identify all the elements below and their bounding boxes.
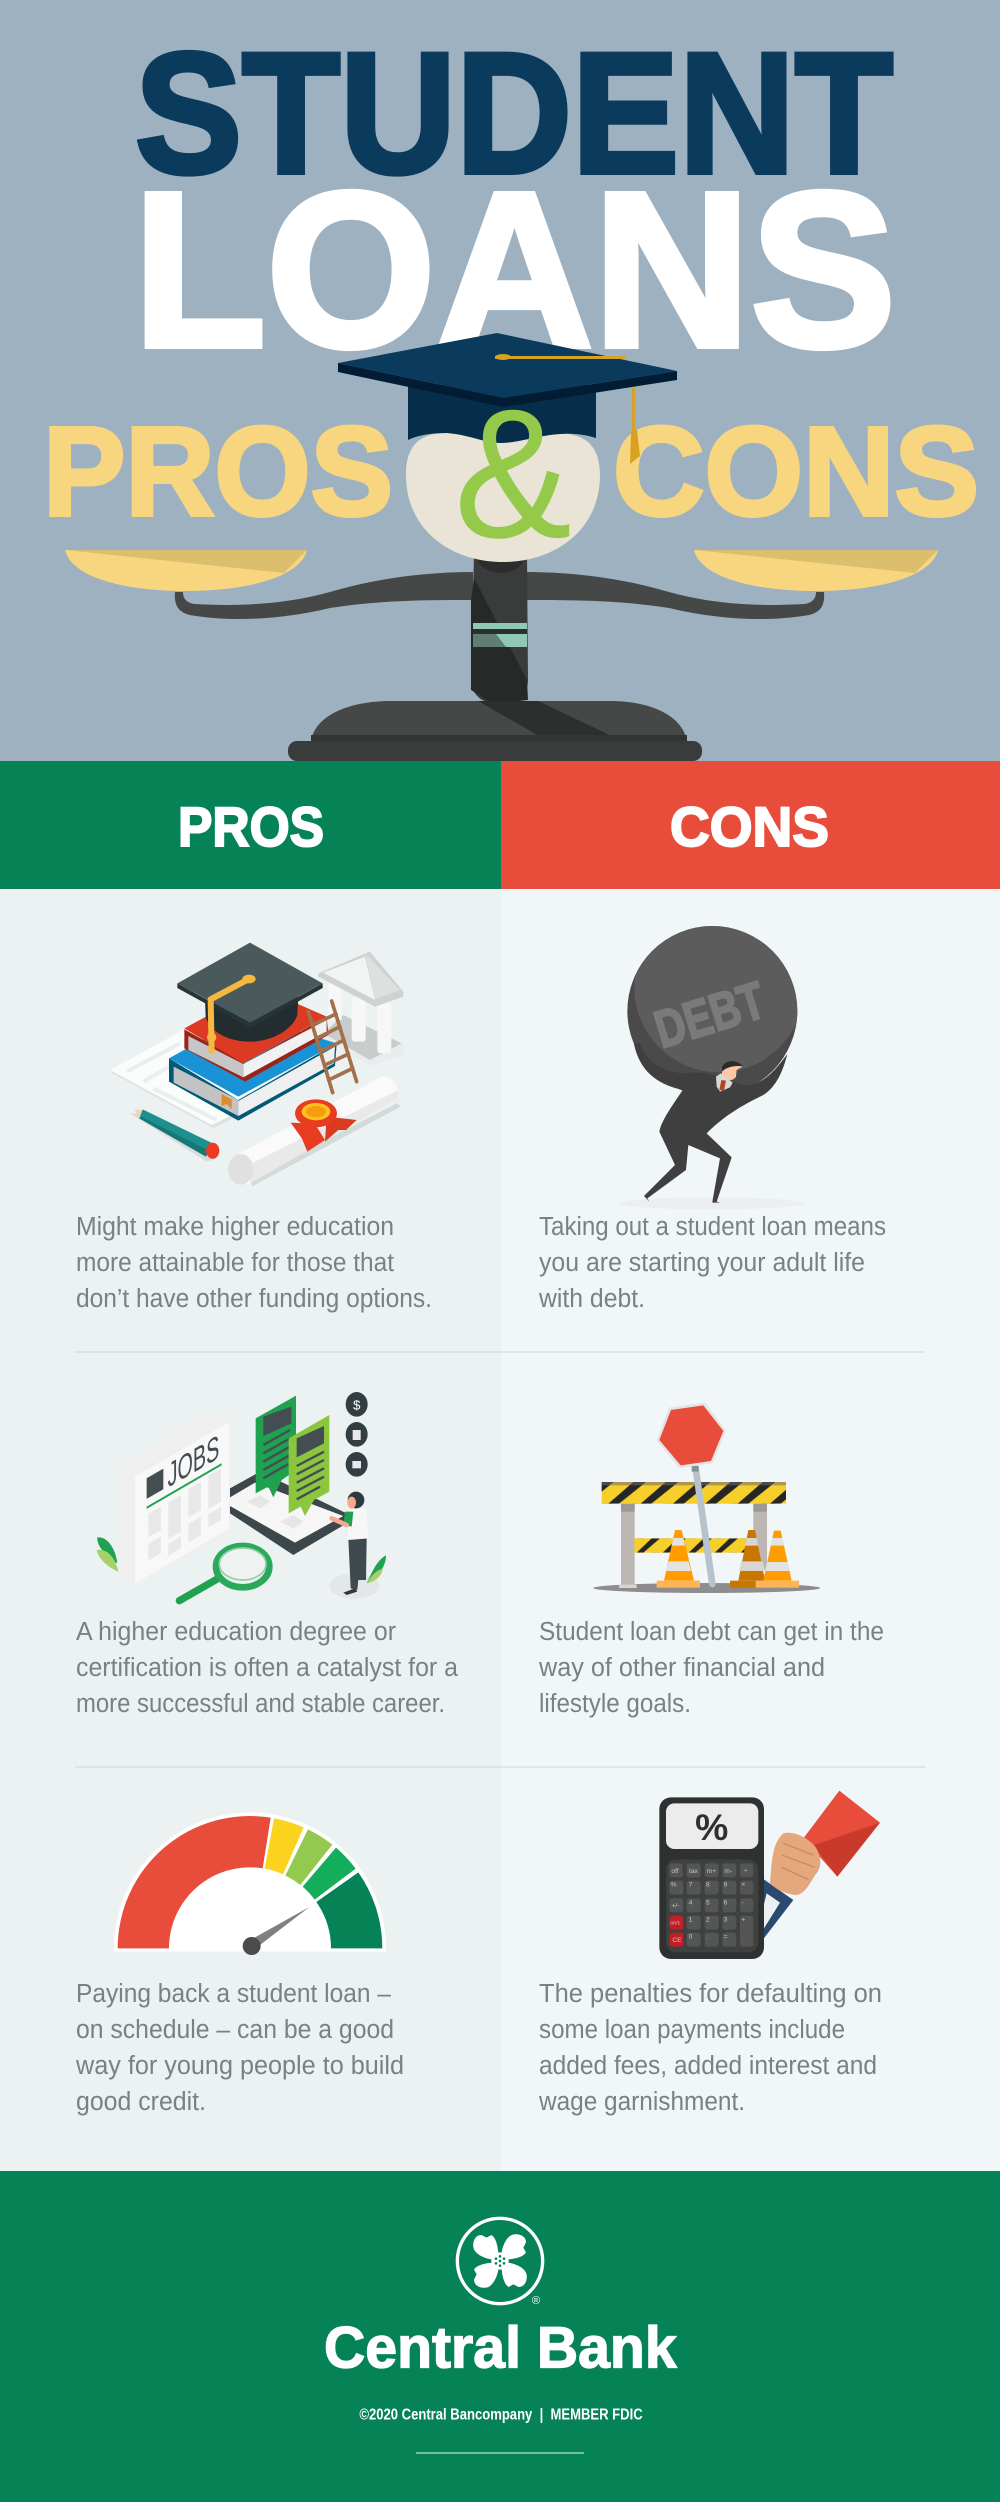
pencil bbox=[130, 1109, 219, 1162]
text: pro 1 bbox=[76, 1213, 432, 1313]
red book bbox=[184, 987, 328, 1082]
calculator keys: . bbox=[706, 1934, 708, 1941]
light green segment bbox=[285, 1829, 332, 1885]
header: cons: CONS bbox=[670, 795, 829, 858]
calculator body bbox=[659, 1797, 764, 1959]
calculator keys: 9 bbox=[724, 1882, 728, 1889]
text: pro 3: on schedule – can be a good bbox=[76, 2016, 394, 2044]
illustration: debt boulder and man bbox=[620, 902, 804, 1209]
calculator keys: % bbox=[671, 1882, 677, 1889]
sleeve bbox=[760, 1877, 793, 1943]
cone 2 bbox=[730, 1530, 765, 1588]
magnifying glass bbox=[179, 1546, 269, 1601]
green segment bbox=[303, 1848, 356, 1900]
leaves left bbox=[97, 1537, 118, 1572]
calculator keys: m+ bbox=[707, 1868, 716, 1875]
right scale pan bbox=[694, 550, 938, 591]
newspaper bbox=[119, 1412, 230, 1583]
calculator keys: 5 bbox=[706, 1899, 710, 1906]
calculator keys: = bbox=[724, 1934, 728, 1941]
calculator keys: - bbox=[741, 1899, 744, 1906]
text: pro 2: certification is often a catalyst for a bbox=[76, 1654, 459, 1682]
text: con 1: you are starting your adult life bbox=[539, 1249, 865, 1277]
illustration: credit score gauge bbox=[114, 1812, 386, 1955]
title: Student Loans bbox=[133, 18, 896, 393]
upper barrier bbox=[602, 1482, 786, 1504]
calculator keys: m- bbox=[724, 1868, 732, 1875]
calculator keys: 0 bbox=[689, 1934, 693, 1941]
calculator keys: off bbox=[671, 1868, 679, 1875]
text: pro 3: way for young people to build bbox=[75, 2052, 404, 2080]
icon: graduation cap bbox=[338, 333, 677, 464]
coin icons: $ bbox=[353, 1397, 361, 1412]
text: pro 1: Might make higher education bbox=[76, 1213, 394, 1241]
text: pro 2 bbox=[76, 1618, 459, 1718]
person bbox=[329, 1492, 386, 1599]
calculator keys: 4 bbox=[689, 1899, 693, 1906]
yellow segment bbox=[265, 1818, 304, 1874]
coin icons bbox=[346, 1392, 368, 1477]
text: pro 2: more successful and stable career. bbox=[76, 1690, 445, 1718]
calculator keys: 3 bbox=[724, 1917, 728, 1924]
text: pro 3: Paying back a student loan – bbox=[76, 1980, 392, 2008]
calculator keys: 6 bbox=[724, 1899, 728, 1906]
panel: pros bbox=[0, 889, 501, 2171]
scale post bbox=[471, 555, 528, 702]
dark green card bbox=[256, 1396, 296, 1497]
dark green segment bbox=[316, 1872, 382, 1948]
newspaper: JOBS bbox=[168, 1427, 219, 1495]
tablet bbox=[230, 1472, 347, 1555]
needle bbox=[243, 1907, 309, 1955]
text: con 2 bbox=[538, 1618, 884, 1718]
text: con 2: way of other financial and bbox=[538, 1654, 825, 1682]
text: con 3: The penalties for defaulting on bbox=[539, 1980, 882, 2008]
panel: cons bbox=[501, 889, 1000, 2171]
text: con 1: with debt. bbox=[538, 1285, 645, 1313]
logo: ® bbox=[532, 2295, 541, 2307]
footer brand block bbox=[324, 2218, 677, 2423]
tassel bbox=[495, 354, 640, 464]
text: con 1 bbox=[538, 1213, 886, 1313]
text: con 2: lifestyle goals. bbox=[539, 1690, 691, 1718]
ampersand: & bbox=[454, 370, 572, 576]
header: pros: PROS bbox=[178, 795, 324, 858]
logo bbox=[457, 2218, 543, 2307]
lower barrier bbox=[634, 1538, 747, 1553]
illustration: roadblock bbox=[593, 1402, 820, 1593]
hand bbox=[770, 1833, 820, 1895]
calculator keys: tax bbox=[689, 1868, 699, 1875]
calculator keys: 2 bbox=[706, 1917, 710, 1924]
header: cons bbox=[501, 761, 1000, 889]
text: con 3 bbox=[538, 1980, 882, 2116]
calculator keys: ÷ bbox=[744, 1868, 748, 1875]
ground shadow bbox=[593, 1583, 820, 1593]
calculator keys: 1 bbox=[689, 1917, 693, 1924]
scale base bbox=[288, 701, 702, 761]
mortarboard bbox=[177, 943, 323, 1053]
text: con 3: wage garnishment. bbox=[538, 2088, 745, 2116]
gauge halo bbox=[114, 1812, 386, 1952]
text: pro 3 bbox=[75, 1980, 404, 2116]
boulder bbox=[627, 926, 798, 1090]
title: Student Loans: LOANS bbox=[133, 146, 896, 393]
cone 3 bbox=[756, 1531, 799, 1588]
hero background bbox=[0, 0, 1000, 761]
footer background bbox=[0, 2171, 1000, 2502]
calculator body: % bbox=[695, 1806, 728, 1848]
heading: Cons: CONS bbox=[613, 401, 979, 542]
calculator keys: CE bbox=[672, 1937, 682, 1944]
illustration: books, cap and diploma bbox=[110, 943, 403, 1187]
cone 1 bbox=[657, 1530, 700, 1588]
calculator keys: +/- bbox=[671, 1903, 679, 1910]
text: con 2: Student loan debt can get in the bbox=[539, 1618, 884, 1646]
calculator keys: × bbox=[741, 1882, 745, 1889]
ladder bbox=[308, 1001, 357, 1093]
blue book bbox=[169, 1015, 337, 1121]
barrier legs bbox=[619, 1504, 767, 1588]
text: pro 1: more attainable for those that bbox=[76, 1249, 394, 1277]
calculator keys: on/c bbox=[670, 1920, 681, 1926]
ground shadow bbox=[620, 1197, 803, 1209]
text: con 3: some loan payments include bbox=[539, 2016, 845, 2044]
left scale pan bbox=[65, 550, 307, 591]
diploma bbox=[228, 1077, 401, 1187]
text: pro 2: A higher education degree or bbox=[76, 1618, 396, 1646]
calculator keys: 8 bbox=[706, 1882, 710, 1889]
calculator keys bbox=[669, 1863, 753, 1947]
man bbox=[634, 1043, 787, 1203]
paper sheet bbox=[110, 1030, 293, 1128]
heading: Pros: PROS bbox=[43, 401, 393, 542]
red card bbox=[803, 1791, 880, 1877]
illustration: calculator and red card bbox=[659, 1791, 880, 1959]
title: Student Loans: STUDENT bbox=[135, 18, 893, 210]
stop sign bbox=[657, 1402, 726, 1584]
text: con 3: added fees, added interest and bbox=[539, 2052, 877, 2080]
boulder: DEBT bbox=[648, 971, 772, 1060]
calculator keys: 7 bbox=[689, 1882, 693, 1889]
calculator keys: + bbox=[741, 1917, 745, 1924]
red segment bbox=[118, 1816, 271, 1948]
temple bbox=[313, 952, 403, 1066]
text: con 1: Taking out a student loan means bbox=[539, 1213, 886, 1241]
bank name: Central Bank bbox=[324, 2316, 677, 2381]
text: pro 1: don’t have other funding options. bbox=[76, 1285, 432, 1313]
header: pros bbox=[0, 761, 501, 889]
illustration: balance scale bbox=[65, 550, 938, 761]
illustration: jobs newspaper bbox=[97, 1392, 386, 1601]
egg shape behind ampersand bbox=[406, 433, 600, 562]
scale beam bbox=[175, 572, 824, 619]
copyright: ©2020 Central Bancompany | MEMBER FDIC bbox=[359, 2406, 643, 2423]
light green card bbox=[289, 1415, 329, 1516]
text: pro 3: good credit. bbox=[76, 2088, 206, 2116]
